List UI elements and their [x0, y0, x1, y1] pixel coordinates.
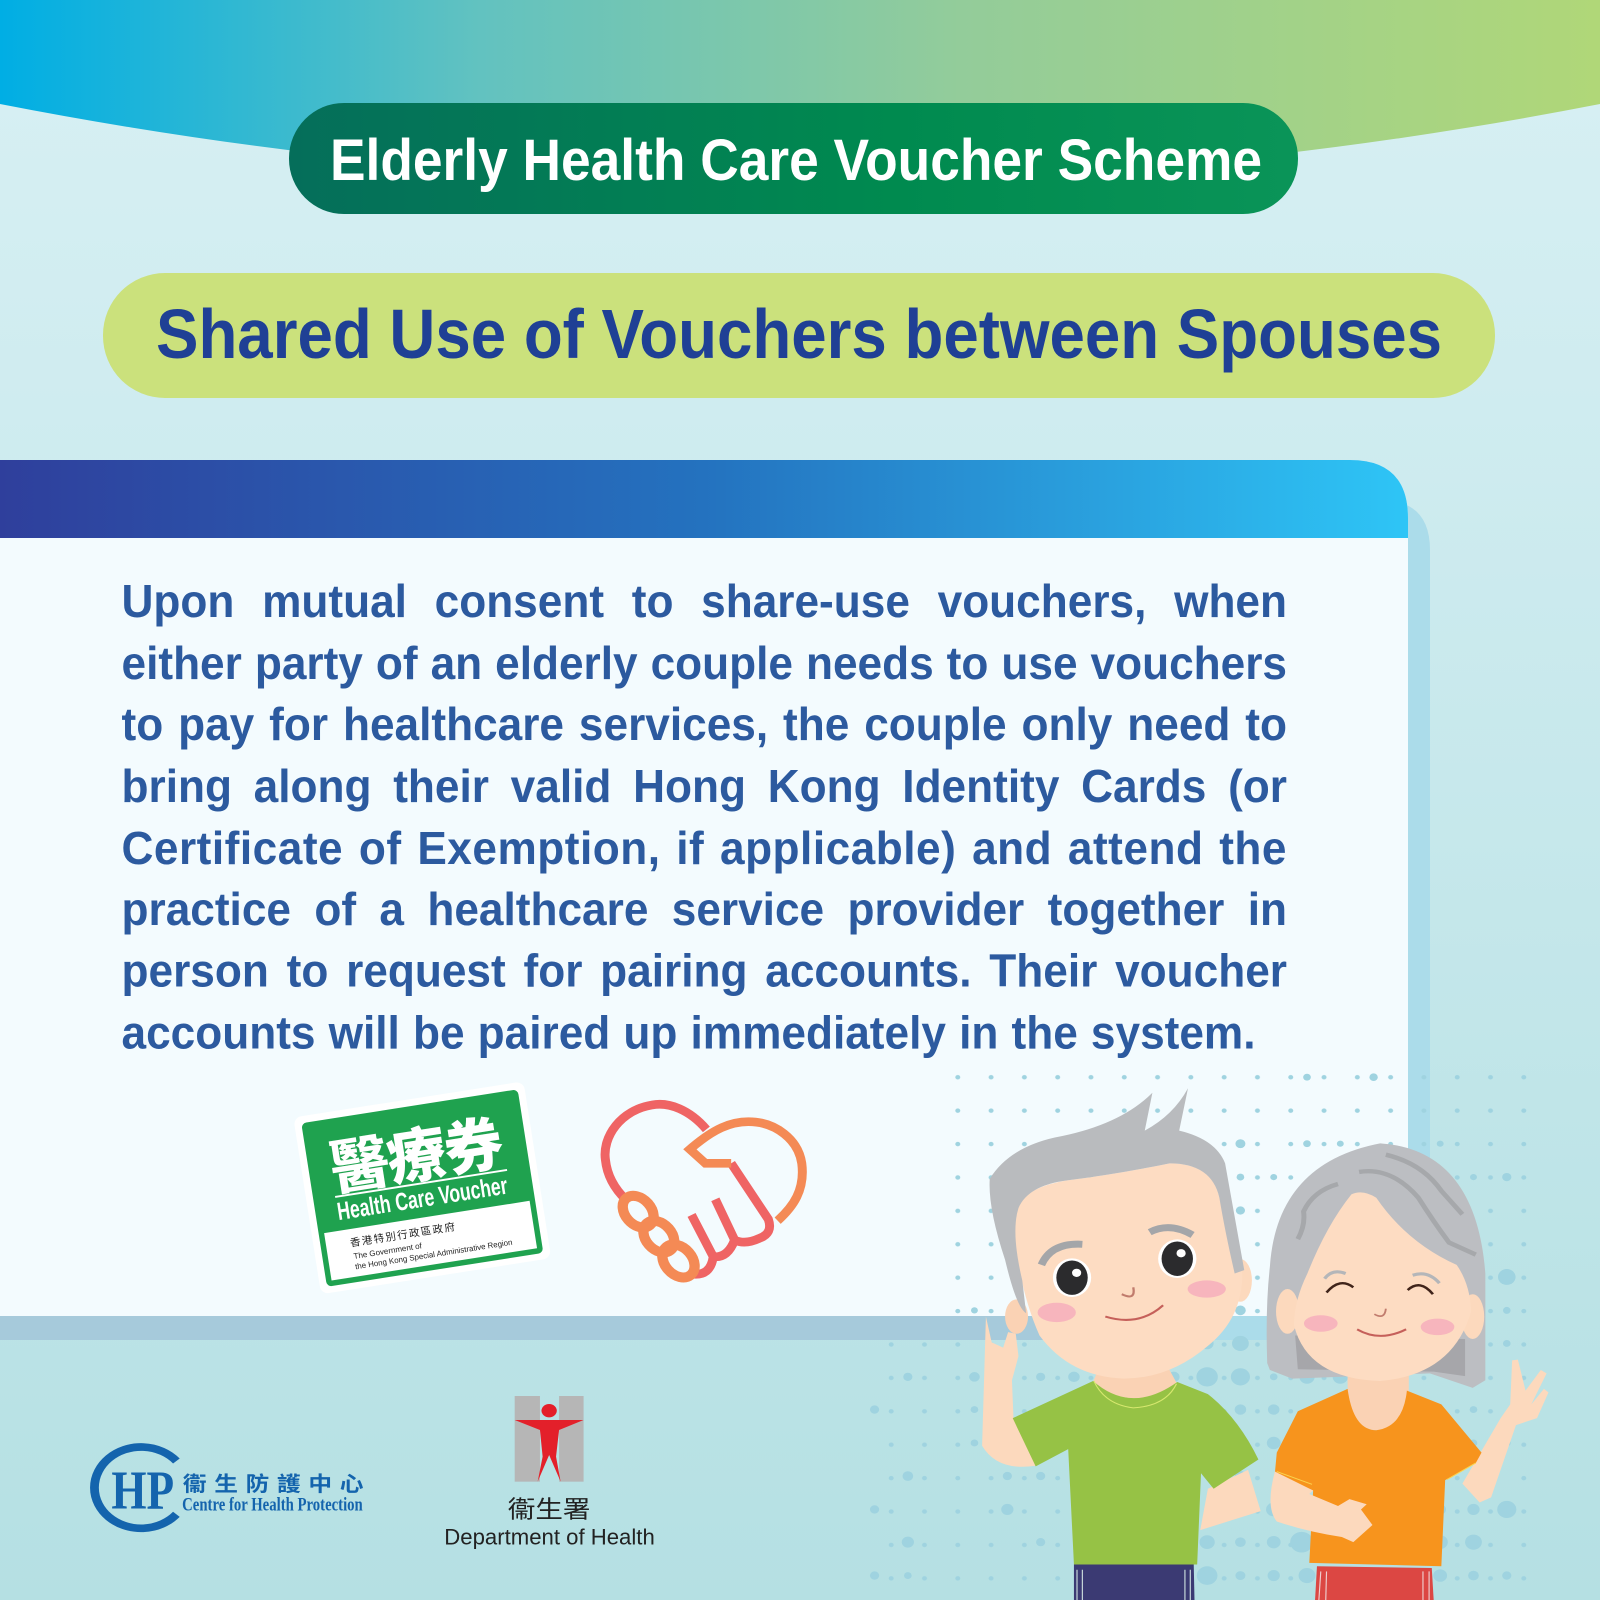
- logo: centre for health protection: HP: [111, 1459, 174, 1520]
- badge government text: The Government of: [353, 1241, 423, 1261]
- man shirt: [1013, 1381, 1258, 1565]
- man ears: [1229, 1259, 1252, 1302]
- subtitle text: Shared Use of Vouchers between Spouses: [156, 295, 1442, 373]
- body paragraph: to pay for healthcare services, the couple only need to: [122, 699, 1287, 751]
- man eyebrows: [1041, 1244, 1082, 1265]
- subtitle pill: [103, 273, 1495, 398]
- woman hair: [1267, 1143, 1485, 1388]
- body paragraph: Certificate of Exemption, if applicable) and attend the: [122, 823, 1287, 874]
- logo: centre for health protection: [94, 1447, 364, 1528]
- man hair: [990, 1088, 1244, 1313]
- logo: department of health: 衞生署: [508, 1496, 590, 1523]
- woman closed eyes: [1327, 1283, 1433, 1294]
- woman shirt: [1275, 1389, 1482, 1566]
- woman neck: [1348, 1370, 1409, 1430]
- logo: department of health: [444, 1396, 655, 1550]
- card header band: [0, 460, 1408, 538]
- woman eyebrows: [1325, 1272, 1439, 1283]
- body paragraph: [122, 576, 1287, 1059]
- logo: centre for health protection: 衞生防護中心: [183, 1472, 364, 1496]
- woman ears: [1276, 1289, 1299, 1334]
- title pill: [289, 103, 1298, 214]
- badge government text: the Hong Kong Special Administrative Region: [355, 1238, 513, 1271]
- woman right arm: [1462, 1360, 1548, 1503]
- badge government text: [349, 1212, 513, 1272]
- woman face: [1294, 1192, 1471, 1381]
- icon: handshake heart: [605, 1104, 802, 1284]
- man pants: [1074, 1565, 1194, 1600]
- man eyes: [1053, 1239, 1196, 1297]
- body paragraph: practice of a healthcare service provider together in: [122, 884, 1287, 936]
- man face: [1013, 1163, 1242, 1379]
- top curved band: [0, 0, 1600, 182]
- logo: department of health: Department of Health: [444, 1526, 655, 1550]
- logo: centre for health protection: Centre for Health Protection: [182, 1495, 363, 1515]
- badge government text: 香港特別行政區政府: [349, 1220, 456, 1250]
- card shadow bottom strip: [0, 1316, 1100, 1340]
- icon: health care voucher badge: [293, 1081, 551, 1294]
- woman lower arm and hand: [1271, 1472, 1372, 1542]
- man neck: [1093, 1363, 1178, 1399]
- panel: main card: [0, 460, 1408, 1316]
- body paragraph: either party of an elderly couple needs to use vouchers: [122, 638, 1287, 689]
- body paragraph: Upon mutual consent to share-use vouchers, when: [122, 576, 1287, 628]
- badge chinese title: 醫療券: [326, 1111, 508, 1203]
- woman shorts: [1315, 1566, 1434, 1600]
- badge english title: Health Care Voucher: [335, 1172, 510, 1226]
- illustration: elderly man: [982, 1088, 1261, 1600]
- card shadow: [0, 500, 1430, 1340]
- man raised arm and hand: [982, 1317, 1036, 1467]
- body paragraph: bring along their valid Hong Kong Identity Cards (or: [122, 761, 1287, 812]
- body paragraph: accounts will be paired up immediately in the system.: [122, 1007, 1256, 1059]
- woman blush: [1304, 1315, 1338, 1332]
- man nose and mouth: [1122, 1287, 1134, 1296]
- woman nose and mouth: [1374, 1309, 1386, 1316]
- title text: Elderly Health Care Voucher Scheme: [330, 128, 1262, 193]
- illustration: elderly woman: [1267, 1143, 1548, 1600]
- man back arm: [1200, 1470, 1261, 1530]
- body paragraph: person to request for pairing accounts. Their voucher: [122, 946, 1287, 997]
- man blush: [1038, 1303, 1076, 1322]
- dotted pattern: [867, 1067, 1548, 1600]
